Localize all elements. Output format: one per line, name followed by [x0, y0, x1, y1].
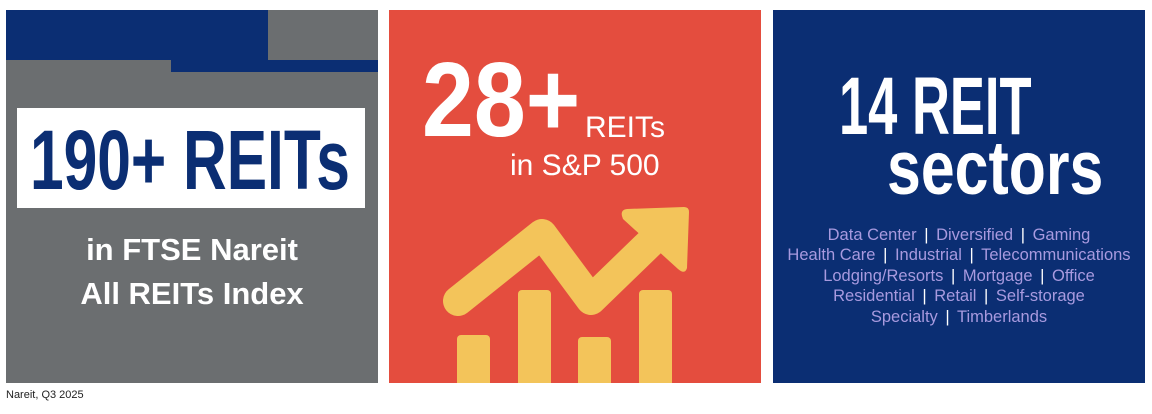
- subtext: FTSE index: All REITs Index: [80, 276, 304, 311]
- subtext: REITs in S&P 500: REITs: [585, 111, 665, 144]
- subtext: FTSE index: [80, 232, 304, 311]
- subtext: REITs in S&P 500: [510, 111, 665, 182]
- headline box: 190+ REITs: 190+ REITs: [30, 113, 350, 207]
- sector list: Lodging/Resorts | Mortgage | Office: [823, 267, 1095, 285]
- sector list: Health Care | Industrial | Telecommunications: [787, 246, 1131, 264]
- headline: 28+: 28+: [422, 41, 580, 159]
- source note: Nareit, Q3 2025: [6, 389, 84, 401]
- panel: red S&P panel: [389, 10, 761, 383]
- panel: blue sectors panel: [773, 10, 1145, 383]
- subtext: FTSE index: in FTSE Nareit: [86, 232, 298, 267]
- decorative blue bar: [6, 10, 268, 60]
- panel: gray FTSE panel: [6, 10, 378, 383]
- sector list: [787, 226, 1131, 326]
- subtext: REITs in S&P 500: in S&P 500: [510, 149, 660, 182]
- sector list: Data Center | Diversified | Gaming: [828, 226, 1090, 244]
- sector list: Residential | Retail | Self-storage: [833, 287, 1085, 305]
- sector list: Specialty | Timberlands: [871, 308, 1047, 326]
- headline: 14 REIT: 14 REIT: [839, 61, 1032, 152]
- headline: sectors: sectors: [887, 126, 1103, 211]
- icon: growth chart: [443, 207, 689, 383]
- decorative blue strip: [171, 60, 378, 72]
